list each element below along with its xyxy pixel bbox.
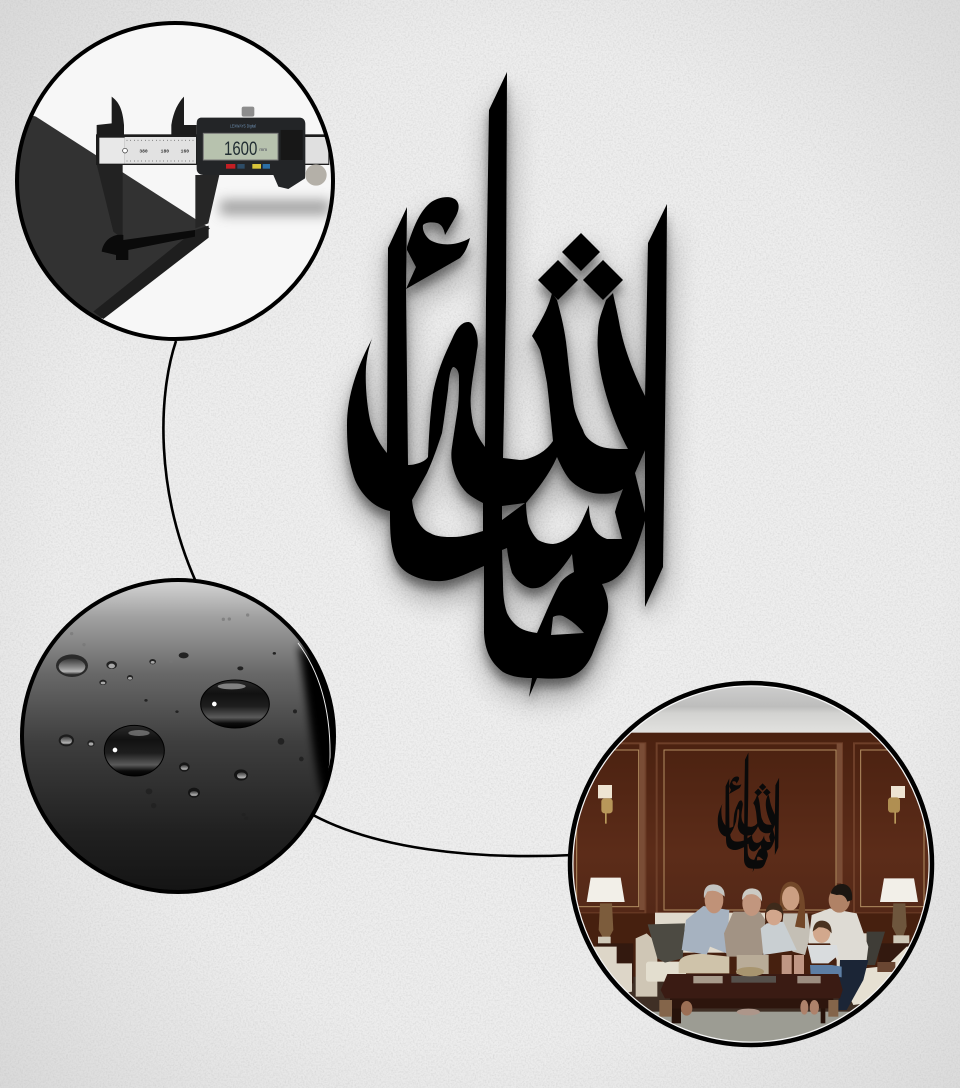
- connector line: caliper circle to droplet circle: [163, 341, 196, 582]
- dark right edge band: [294, 642, 332, 794]
- girl: [761, 922, 797, 955]
- coffee table: [661, 974, 843, 998]
- mother: [782, 913, 811, 955]
- grandmother: [724, 912, 765, 957]
- rug: [652, 1012, 850, 1042]
- floor: [628, 976, 860, 1012]
- caliper jaws: [97, 97, 124, 135]
- miniature calligraphy on the wall: [718, 752, 779, 872]
- table lamps: [587, 878, 625, 902]
- father: [808, 908, 868, 960]
- pillows: [648, 923, 685, 963]
- thin highlight of panel edge: [298, 642, 331, 770]
- caliper shadow: [220, 200, 330, 215]
- medium droplets: [56, 654, 88, 677]
- boy: [807, 945, 839, 963]
- panel edge: [93, 226, 209, 319]
- circle: thickness measured with caliper: [10, 23, 333, 339]
- dark panel: [10, 108, 210, 318]
- wood wall: [574, 732, 928, 914]
- ruler numbers: 380: [139, 148, 148, 154]
- caliper ruler: [96, 134, 329, 165]
- feet: [681, 1001, 692, 1016]
- main sofa: [655, 913, 765, 953]
- buttons: [226, 164, 235, 169]
- items on table: [693, 976, 723, 983]
- LCD reading: 1600: [224, 139, 257, 160]
- circle: family in a wood-panelled living room: [570, 680, 935, 1048]
- small droplets: [87, 652, 304, 820]
- side sofas: [594, 946, 632, 992]
- grandfather: [682, 906, 729, 955]
- LCD unit: mm: [259, 147, 267, 152]
- large droplets: [201, 680, 269, 728]
- side tables: [597, 943, 633, 983]
- ruler numbers: 180: [161, 148, 169, 154]
- brand label: LEXWAYS Digital: [230, 124, 256, 129]
- connector line: droplet circle to room circle: [313, 815, 573, 856]
- main calligraphy wall art: [347, 72, 667, 697]
- ruler numbers: 160: [181, 148, 189, 154]
- wall sconces: [598, 785, 612, 798]
- ceiling: [632, 686, 870, 733]
- LCD display: [203, 133, 278, 160]
- circle: water droplets on the black surface: [22, 580, 345, 892]
- caliper body: [197, 118, 305, 189]
- wall panels: [573, 743, 931, 913]
